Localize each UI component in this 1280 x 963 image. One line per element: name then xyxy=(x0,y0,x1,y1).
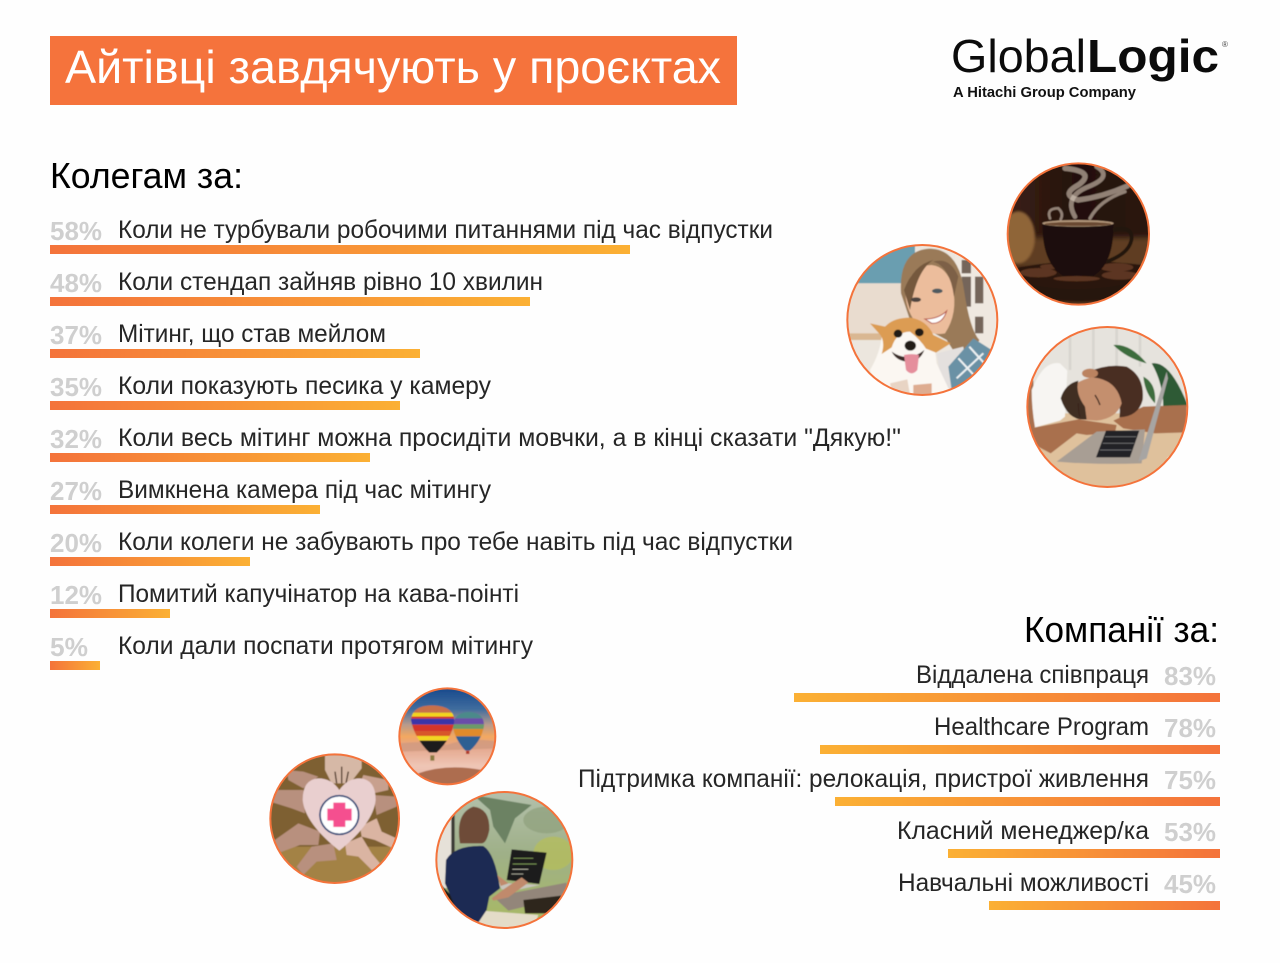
logo: GlobalLogic xyxy=(951,30,1228,101)
row 32%: Коли весь мітинг можна просидіти мовчки, а в кінці сказати "Дякую!" xyxy=(118,424,901,452)
row 20%: Коли колеги не забувають про тебе навіть під час відпустки xyxy=(118,528,793,556)
row 53%: Класний менеджер/ка xyxy=(897,817,1149,845)
panel: colleagues ranking xyxy=(50,155,901,670)
icon: woman at laptop by window photo xyxy=(435,791,574,930)
row 32%: 32% xyxy=(50,424,102,454)
row 37% xyxy=(50,320,420,358)
title banner: Айтівці завдячують у проєктах xyxy=(65,41,721,93)
row 78% xyxy=(820,713,1220,754)
row 45% xyxy=(898,869,1220,910)
row 53%: 53% xyxy=(1164,817,1216,847)
heading: company: Компанії за: xyxy=(1024,609,1219,650)
row 78%: 78% xyxy=(1164,713,1216,743)
row 83%: Віддалена співпраця xyxy=(916,661,1149,689)
row 12% xyxy=(50,580,519,618)
row 37%: Мітинг, що став мейлом xyxy=(118,320,386,348)
logo: GlobalLogic: A Hitachi Group Company xyxy=(953,85,1136,101)
row 58%: 58% xyxy=(50,216,102,246)
row 75%: 75% xyxy=(1164,765,1216,795)
icon: coffee cup photo xyxy=(1002,162,1152,308)
row 5% xyxy=(50,632,533,670)
row 12%: Помитий капучінатор на кава-поінті xyxy=(118,580,519,608)
row 35%: 35% xyxy=(50,372,102,402)
row 58% xyxy=(50,216,773,254)
row 48%: 48% xyxy=(50,268,102,298)
row 20% xyxy=(50,528,793,566)
row 32% xyxy=(50,424,901,462)
row 45%: Навчальні можливості xyxy=(898,869,1149,897)
row 35%: Коли показують песика у камеру xyxy=(118,372,491,400)
row 75% xyxy=(578,765,1220,806)
row 5%: 5% xyxy=(50,632,88,662)
panel: company ranking xyxy=(578,609,1220,910)
icon: man asleep on laptop photo xyxy=(1027,327,1188,490)
row 48% xyxy=(50,268,543,306)
row 48%: Коли стендап зайняв рівно 10 хвилин xyxy=(118,268,543,296)
heading: colleagues: Колегам за: xyxy=(50,155,243,196)
row 5%: Коли дали поспати протягом мітингу xyxy=(118,632,533,660)
row 58%: Коли не турбували робочими питаннями під час відпустки xyxy=(118,216,773,244)
row 20%: 20% xyxy=(50,528,102,558)
row 12%: 12% xyxy=(50,580,102,610)
row 45%: 45% xyxy=(1164,869,1216,899)
logo: GlobalLogic: Global xyxy=(951,30,1086,82)
row 27%: Вимкнена камера під час мітингу xyxy=(118,476,491,504)
icon: hot air balloons photo xyxy=(398,687,497,787)
row 78%: Healthcare Program xyxy=(934,713,1149,741)
row 83%: 83% xyxy=(1164,661,1216,691)
row 27% xyxy=(50,476,491,514)
icon: woman with corgi photo xyxy=(847,245,997,397)
row 53% xyxy=(897,817,1220,858)
row 83% xyxy=(794,661,1220,702)
logo: GlobalLogic: ® xyxy=(1222,40,1228,49)
icon: hands holding heart with medical cross xyxy=(270,754,400,884)
row 27%: 27% xyxy=(50,476,102,506)
row 75%: Підтримка компанії: релокація, пристрої живлення xyxy=(578,765,1149,793)
row 37%: 37% xyxy=(50,320,102,350)
logo: GlobalLogic: Logic xyxy=(1087,30,1219,82)
row 35% xyxy=(50,372,491,410)
